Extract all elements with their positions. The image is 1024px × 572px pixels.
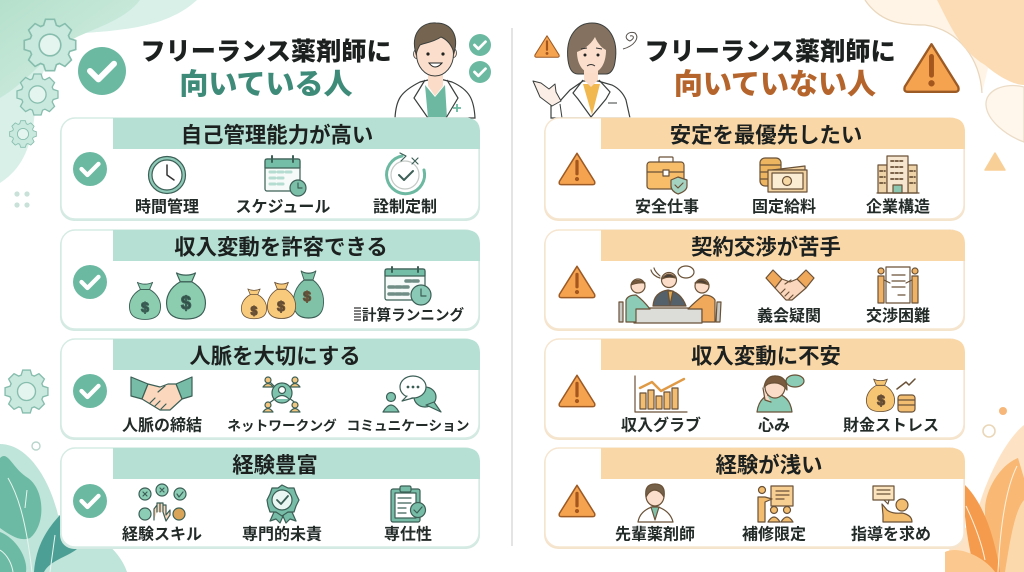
left header: suited: [78, 38, 392, 101]
label: 義会疑関: [757, 306, 821, 325]
icon: contract: [878, 267, 918, 303]
icon: briefcase shield: [647, 157, 687, 194]
panel: 収入変動を許容できる: [60, 230, 480, 331]
illustration: female pharmacist: [533, 23, 637, 118]
icon: teacher: [758, 486, 793, 522]
label: 安全仕事: [635, 197, 699, 216]
icon: warning: [559, 153, 595, 185]
label: 専門的未責: [242, 524, 322, 544]
panel: 人脈を大切にする: [60, 339, 480, 440]
label: ネットワークング: [227, 418, 337, 434]
heading: 収入変動に不安: [691, 344, 841, 368]
icon: coins and bill: [760, 158, 807, 192]
icon: network: [263, 377, 300, 412]
icon: orange handshake: [766, 270, 814, 300]
background: bottom-right leaves: [945, 425, 1024, 572]
panel: 契約交渉が苦手: [544, 230, 965, 331]
icon: clipboard: [391, 486, 426, 522]
center divider: [511, 28, 513, 546]
icon: handshake: [131, 377, 192, 410]
icon: calendar with clock: [385, 267, 431, 305]
heading: 人脈を大切にする: [189, 344, 361, 368]
title line 1: フリーランス薬剤師に: [644, 38, 896, 66]
icon: check: [73, 265, 107, 299]
icon: warning: [559, 375, 595, 407]
label: 財金ストレス: [843, 416, 939, 434]
illustration: male pharmacist: [395, 23, 475, 118]
label: 心み: [758, 416, 790, 434]
icon: decorative checks: [469, 34, 491, 83]
icon: calendar: [265, 156, 306, 196]
panel: 収入変動に不安: [544, 339, 965, 440]
icon: money bags: $: [141, 299, 149, 315]
icon: conversation: [383, 376, 441, 412]
icon: check: [73, 374, 107, 408]
label: 補修限定: [742, 526, 806, 544]
icon: worried person: [757, 375, 804, 412]
panel: 自己管理能力が高い: [60, 118, 480, 221]
icon: mixed money bags: [241, 271, 324, 319]
icon: mixed money bags: $: [303, 288, 311, 304]
icon: skills and hand: [139, 484, 186, 521]
right header: unsuited: [644, 38, 959, 101]
label: 時間管理: [135, 197, 199, 216]
icon: large check: [78, 47, 126, 95]
title line 2: 向いている人: [179, 68, 353, 101]
background: top-left green blob: [0, 0, 197, 183]
label: 経験スキル: [122, 526, 202, 544]
icon: bag coins stress: [866, 379, 915, 412]
label: スケジュール: [236, 198, 330, 216]
label: 人脈の締結: [122, 416, 202, 434]
label: 詮制定制: [373, 198, 437, 216]
icon: small list mark: [354, 308, 361, 320]
label: 固定給料: [752, 198, 816, 216]
icon: income chart: [635, 376, 687, 412]
background: gears: [5, 19, 76, 413]
icon: warning: [559, 266, 595, 298]
label: 収入グラブ: [621, 416, 701, 434]
heading: 安定を最優先したい: [670, 124, 862, 148]
icon: bag coins stress: $: [877, 392, 885, 408]
label: コミュニケーション: [347, 418, 469, 434]
icon: mixed money bags: $: [251, 304, 258, 318]
icon: large warning: [904, 44, 959, 92]
background: top-right peach blobs: [865, 0, 1024, 437]
icon: office building: [877, 156, 919, 193]
icon: raising hand: [873, 486, 912, 522]
icon: warning: [559, 485, 595, 517]
panel: 経験が浅い: [544, 448, 965, 549]
icon: award medal: [267, 485, 299, 523]
panel: 安定を最優先したい: [544, 118, 965, 221]
icon: small warning: [535, 36, 559, 57]
label: 交渉困難: [866, 306, 930, 325]
icon: check: [73, 484, 107, 518]
title line 2: 向いていない人: [674, 68, 876, 101]
icon: money bags: [129, 273, 205, 319]
icon: clock: [148, 156, 186, 194]
heading: 経験豊富: [232, 454, 318, 478]
icon: check: [73, 152, 107, 186]
heading: 自己管理能力が高い: [181, 122, 373, 148]
label: 指導を求め: [851, 524, 931, 544]
icon: timer check: [387, 153, 425, 194]
background: bottom-left leaves: [0, 444, 127, 572]
label: 計算ランニング: [362, 306, 464, 324]
title line 1: フリーランス薬剤師に: [140, 38, 392, 66]
label: 先輩薬剤師: [615, 524, 695, 544]
icon: mixed money bags: $: [277, 298, 285, 314]
heading: 収入変動を許容できる: [174, 236, 388, 260]
heading: 契約交渉が苦手: [691, 234, 841, 260]
heading: 経験が浅い: [716, 452, 822, 478]
background: dots and ring: [14, 191, 40, 450]
label: 専仕性: [384, 524, 432, 544]
icon: money bags: $: [181, 293, 191, 313]
label: 企業構造: [866, 197, 930, 216]
icon: negotiation meeting: [619, 266, 721, 323]
icon: senior pharmacist: [638, 484, 673, 522]
panel: 経験豊富: [60, 448, 480, 549]
